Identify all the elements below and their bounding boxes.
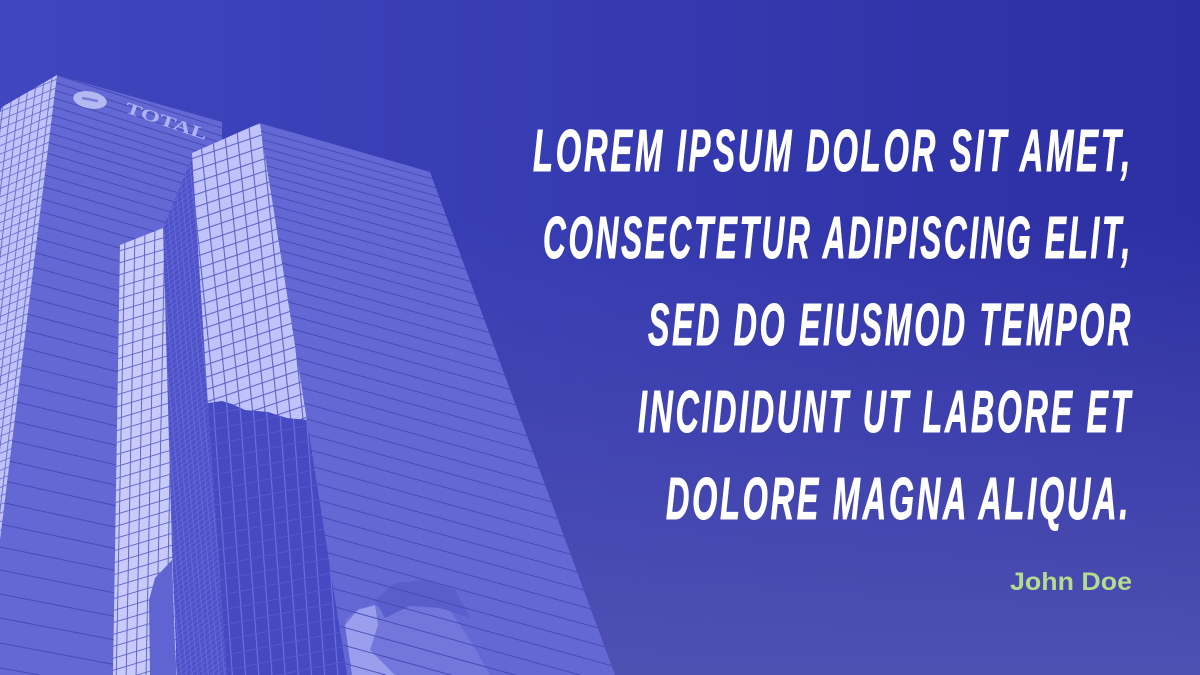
- tower A: lit face: [0, 75, 57, 540]
- tower B: bright cloud patch: [345, 605, 395, 675]
- building illustration: [0, 75, 615, 675]
- tower B: medium shaded face: [250, 120, 620, 675]
- tower A: medium shaded face: [0, 57, 230, 675]
- tower C: lit face: [113, 228, 177, 675]
- tower B: cloud reflection: [345, 600, 490, 675]
- author name: John Doe: [1010, 568, 1132, 596]
- tower C: tree reflection: [149, 560, 176, 675]
- tower B: lit face: [192, 123, 308, 425]
- tower B: dark cloud band: [375, 580, 470, 618]
- tower B: narrow shaded side: [163, 158, 228, 675]
- tower A: logo: [72, 89, 108, 111]
- tower A: sign text: TOTAL: [123, 100, 210, 144]
- tower B: dark reflection: [208, 401, 347, 675]
